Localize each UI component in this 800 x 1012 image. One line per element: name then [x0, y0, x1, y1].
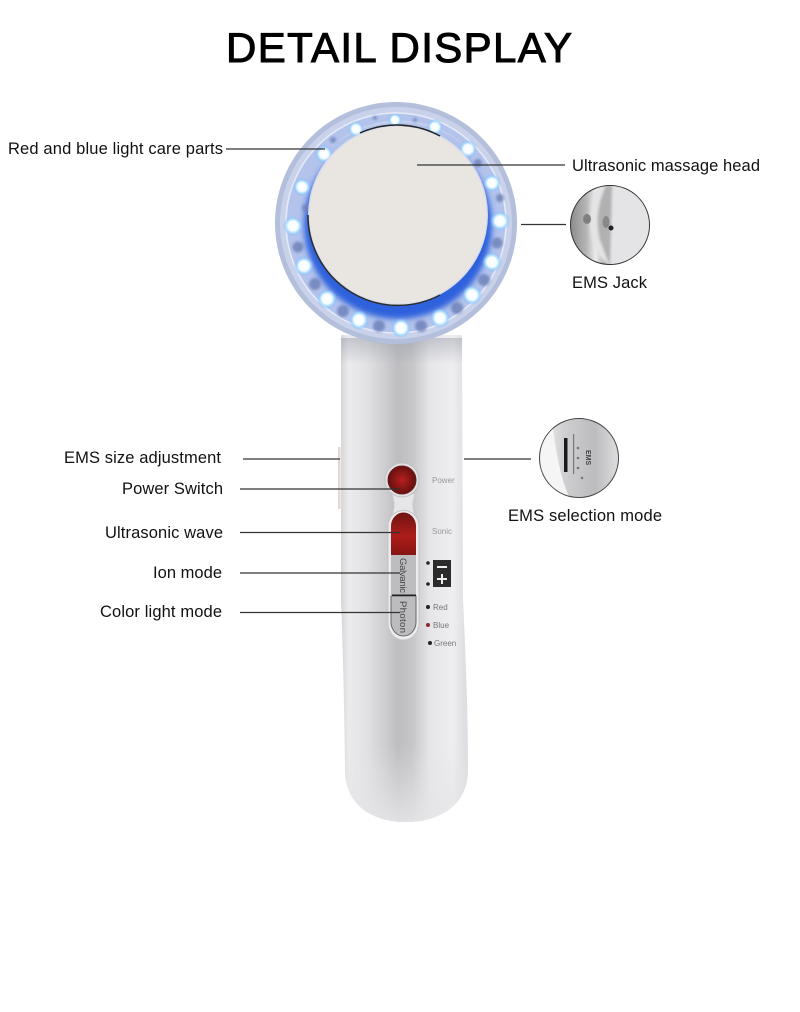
label: EMS selection mode: EMS selection mode	[508, 507, 662, 525]
control strip	[388, 510, 419, 640]
device small labels	[426, 476, 456, 648]
device small labels: Sonic	[432, 527, 452, 536]
title: DETAIL DISPLAY	[226, 24, 572, 71]
device small labels: Power	[432, 476, 455, 485]
inset: EMS selection	[540, 418, 618, 498]
label: Red and blue light care parts: Red and blue light care parts	[8, 140, 223, 158]
label: Power Switch: Power Switch	[122, 480, 223, 498]
galvanic button: Galvanic	[397, 558, 408, 593]
power button	[385, 463, 419, 516]
device head: LED ring	[275, 102, 517, 344]
ultrasonic wave button	[391, 512, 416, 555]
EMS level display	[426, 560, 451, 587]
label: EMS Jack: EMS Jack	[572, 274, 648, 292]
device handle	[335, 335, 475, 825]
label: EMS size adjustment: EMS size adjustment	[64, 449, 221, 467]
device small labels: Green	[434, 639, 456, 648]
LED lights	[283, 113, 510, 338]
label: Ion mode: Ion mode	[153, 564, 222, 582]
device small labels: Red	[433, 603, 448, 612]
ultrasonic massage plate	[308, 125, 488, 305]
leader lines	[226, 149, 566, 612]
inset: EMS selection: EMS	[584, 450, 591, 466]
photon button: Photon	[397, 601, 408, 633]
label: Color light mode: Color light mode	[100, 603, 222, 621]
device small labels: Blue	[433, 621, 450, 630]
label: Ultrasonic wave: Ultrasonic wave	[105, 524, 223, 542]
label: Ultrasonic massage head: Ultrasonic massage head	[572, 157, 760, 175]
device: handheld massager	[275, 102, 517, 825]
inset: EMS jack	[570, 186, 652, 266]
